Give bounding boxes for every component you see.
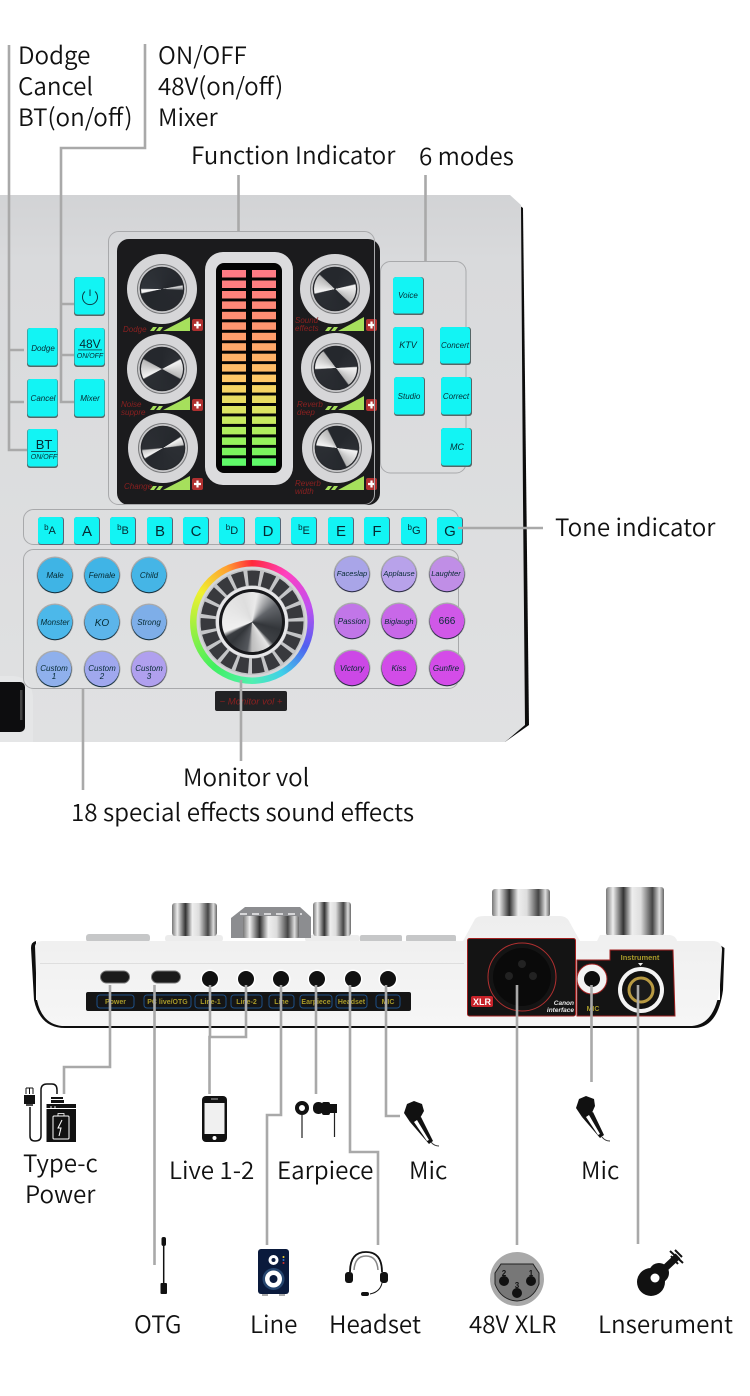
knob: Reverb deep: deep [297,408,315,417]
pad: Gunfire: Gunfire [433,664,460,673]
pad: Custom 3: Custom [135,664,163,673]
knob: Change: Change [124,482,153,491]
label: mic one: Mic [409,1151,447,1186]
pad: Child: Child [140,571,159,580]
pad: Monster [36,604,74,640]
audio jacks [200,970,398,988]
key: A [74,517,100,545]
pad: Monster: Monster [41,618,70,627]
key: B: B [155,523,165,540]
leader lines: rear device [64,985,638,1265]
pad: Custom 1: Custom [40,664,68,673]
key: flat E [291,517,317,545]
key: G [437,517,463,545]
pad: Biglaugh: Biglaugh [384,617,414,626]
pad: Custom 2: Custom [88,664,116,673]
key: flat B: B [122,525,129,537]
knob: Noise suppress [121,334,203,417]
pad: Passion: Passion [338,617,367,626]
button: Concert [440,327,471,365]
pad: Custom 1: 1 [52,672,56,681]
label: mic two: Mic [581,1151,619,1186]
button group: 18 sound effects [36,556,466,688]
knob: Dodge: Dodge [123,325,147,334]
button: 48V: ON/OFF [77,353,104,360]
key: B [147,517,173,545]
icon: guitar [637,1250,683,1296]
key: C: C [191,523,202,540]
port label strip: Power [105,999,126,1006]
button: Dodge: Dodge [31,344,55,353]
key: F: F [372,523,382,540]
key: flat E: E [303,525,310,537]
label: mixer: Mixer [158,98,219,133]
knob: monitor volume with rainbow ring [190,560,314,684]
label: left function list: Dodge [18,36,90,71]
pad: Victory [334,650,370,686]
knob: Reverb width: Reverb [295,479,321,488]
mic and instrument panel: Instrument [621,953,660,962]
key: D: D [263,523,274,540]
key: E: E [336,523,346,540]
icon: microphone two [576,1096,610,1141]
panel: top view of device body [0,195,529,742]
pad: Custom 3: 3 [147,672,152,681]
label: line: Line [250,1305,297,1340]
pad: Female [84,556,120,594]
port label strip: MIC [382,999,394,1006]
panel: outline around tones [24,510,458,544]
label: bluetooth: BT(on/off) [18,98,132,133]
pad: Male: Male [46,571,64,580]
button: MC [441,428,472,467]
port label strip: PC live/OTG [147,999,188,1006]
key: A: A [82,523,92,540]
port label strip: Line-1 [200,999,221,1006]
pad: KO: KO [95,618,109,629]
pad: Custom 3 [130,650,168,688]
button: Studio: Studio [398,392,421,401]
icon: earphones [297,1102,337,1138]
label: 48V: 48V(on/off) [158,67,283,102]
pad: Applause [380,556,418,592]
knob: Reverb width: width [295,487,314,496]
heading: six modes: 6 modes [419,137,514,172]
button: Voice: Voice [398,291,418,300]
button: Cancel: Cancel [31,394,56,403]
button: Mixer: Mixer [80,394,100,403]
plate: monitor volume label [215,691,287,711]
key: flat D: b [226,523,231,532]
XLR panel: Canon [554,1000,574,1007]
label: sound effects: 18 special effects sound effects [71,793,414,828]
pad: Passion [334,602,370,640]
label: 48V XLR: 48V XLR [469,1305,556,1340]
pad: Strong: Strong [137,618,161,627]
key: C [183,517,209,545]
key: G: G [444,523,456,540]
icon: microphone one [404,1101,439,1146]
pad: Strong [130,604,168,640]
key: flat E: b [298,523,303,532]
key: flat D: D [230,525,238,537]
knob: Noise suppress: suppre [121,408,146,417]
button: KTV [393,327,424,365]
pad: 666: 666 [439,616,456,627]
label: cancel: Cancel [18,67,93,102]
button: Power [74,277,105,316]
pad: Custom 2: 2 [99,672,105,681]
panel: outline around six modes [380,262,466,473]
XLR panel: interface [547,1007,574,1014]
button: Concert: Concert [441,341,470,350]
button: Studio [394,377,425,416]
XLR panel [468,938,576,1016]
icon: phone [202,1096,227,1142]
button group: six modes [393,277,472,467]
knob: Reverb deep: Reverb [297,400,323,409]
label: earpiece: Earpiece [277,1151,373,1186]
pad: Faceslap: Faceslap [337,569,367,578]
mic and instrument panel [577,950,675,1016]
rear knobs [86,887,664,942]
panel: outline around knobs [108,232,374,504]
level meter [205,252,293,485]
label: monitor volume: Monitor vol [183,758,309,793]
label: type-c: Type-c [23,1144,98,1179]
button: Voice [393,277,424,315]
key: flat A [38,517,64,545]
knob: Dodge [123,254,203,334]
button: MC: MC [450,442,464,452]
knob: Noise suppress: Noise [121,400,142,409]
mic and instrument panel: MIC [587,1006,599,1013]
button: 48V [74,328,105,367]
key: flat D [219,517,245,545]
label: on off: ON/OFF [158,36,247,71]
icon: speaker [258,1249,289,1296]
knob: Sound effects [295,254,377,333]
panel: rear view of device [31,887,724,1028]
pad: Male [36,556,74,594]
key: flat G: G [412,525,421,537]
type-c ports [100,971,180,983]
bottom-left display window [0,676,33,742]
label: tone indicator: Tone indicator [555,508,716,543]
button: KTV: KTV [399,340,418,350]
key: flat A: b [44,523,49,532]
pad: Faceslap [334,556,370,592]
pad: KO [84,604,120,640]
label: instrument: Lnserument [598,1305,733,1340]
port label strip: Line-2 [236,999,257,1006]
pad: Female: Female [89,571,116,580]
key: F [364,517,390,545]
button: Cancel [27,379,58,418]
pad: Biglaugh [380,602,418,640]
button: BT: BT [36,437,52,452]
icon: OTG cable [160,1237,167,1294]
plate: monitor volume label: − Monitor vol + [220,696,283,708]
label: headset: Headset [329,1305,421,1340]
button group: tone keys [38,517,463,545]
knob: Sound effects: Sound [295,316,319,325]
icon: XLR socket: 3 [515,1281,520,1290]
pad: Gunfire [428,650,466,686]
pad: Kiss: Kiss [391,664,407,673]
panel: knob and level meter plate [117,239,380,505]
key: D [255,517,281,545]
key: flat B: b [117,523,122,532]
icon: headset [345,1252,388,1296]
label: power: Power [25,1175,96,1210]
icon: XLR socket: 1 [529,1269,534,1278]
icon: XLR socket: 2 [502,1269,507,1278]
icon: type-c power [24,1084,76,1142]
label: OTG: OTG [134,1305,181,1340]
pad: Laughter: Laughter [431,569,461,578]
icon: XLR socket [490,1252,544,1306]
button: Dodge [27,328,58,367]
pad: Laughter [428,556,466,592]
knob: Reverb width [295,413,377,496]
button: 48V: 48V [79,337,101,351]
knob: Reverb deep [297,333,377,417]
pad: Custom 2 [84,650,120,688]
button: Correct [441,377,472,416]
pad: Victory: Victory [340,664,365,673]
port label strip: Line [274,999,289,1006]
button: Mixer [74,379,105,418]
button: BT: ON/OFF [31,454,58,461]
button: Correct: Correct [443,392,470,401]
key: flat B [110,517,136,545]
port label strip [86,992,411,1011]
leader lines: top device [9,44,543,790]
key: flat G [401,517,427,545]
pad: 666 [428,602,466,640]
knob: Change [124,413,203,491]
label: live: Live 1-2 [169,1151,254,1186]
pad: Child [130,556,168,594]
key: E [328,517,354,545]
key: flat A: A [49,525,57,537]
panel: outline around sound effects [24,550,458,688]
pad: Kiss [380,650,418,686]
key: flat G: b [407,523,412,532]
button group: left function keys [27,277,105,468]
port label strip: Earpiece [301,999,331,1006]
pad: Applause: Applause [382,569,415,578]
port label strip: Headset [338,999,366,1006]
heading: function indicator: Function Indicator [191,136,396,171]
knob: Sound effects: effects [295,324,319,333]
button: BT [27,429,58,468]
XLR panel: XLR [473,997,492,1007]
pad: Custom 1 [36,650,72,688]
